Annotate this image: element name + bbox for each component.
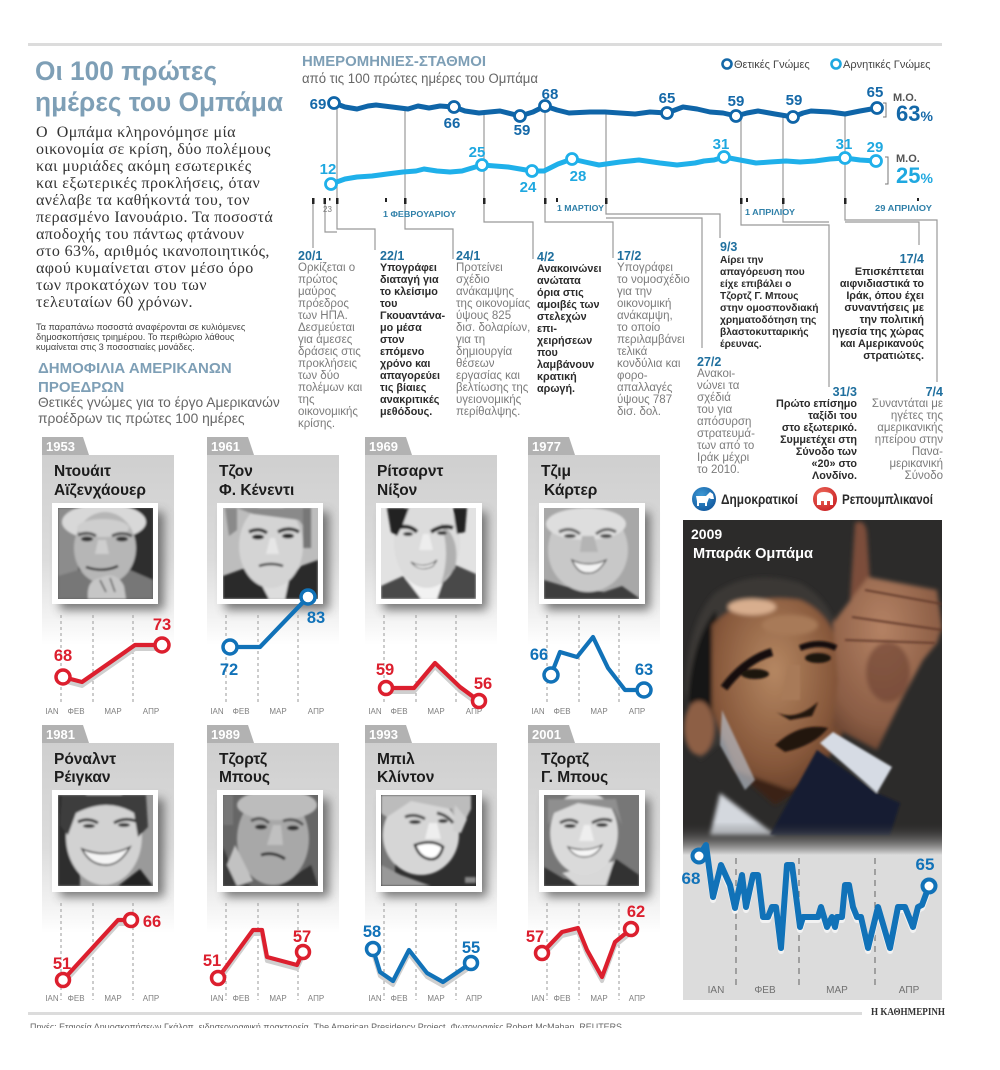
milestone 27/2: των από το [697, 440, 754, 452]
photo: Eisenhower [58, 508, 153, 599]
milestone 17/2: για την [617, 286, 652, 298]
milestone 24/1: περίθαλψης. [456, 406, 520, 418]
panel: Nixon 1969: ΦΕΒ [390, 707, 408, 716]
milestone 31/3: στο εξωτερικό. [782, 422, 857, 434]
panel: Clinton 1993 [363, 725, 497, 1003]
intro text: και μυριάδες ακόμη εσωτερικές [36, 158, 252, 175]
milestone 20/1: Ορκίζεται ο [298, 262, 355, 274]
milestone 20/1: μαύρος [298, 286, 337, 298]
title: Οι 100 πρώτες [35, 56, 217, 86]
milestone 7/4: Σύνοδο [905, 470, 943, 482]
panel: Carter 1977: ΑΠΡ [629, 707, 645, 716]
panel: Obama 2009: ΜΑΡ [826, 985, 848, 996]
panel: Eisenhower 1953: ΦΕΒ [67, 707, 85, 716]
panel: Nixon 1969: ΙΑΝ [368, 707, 382, 716]
milestone 4/2: χειρήσεων [537, 335, 592, 347]
panel: Reagan 1981: ΑΠΡ [143, 994, 159, 1003]
milestone 9/3: απαγόρευση που [720, 267, 805, 278]
milestone 7/4: Πανα- [912, 446, 943, 458]
panel: Kennedy 1961: ΙΑΝ [210, 707, 224, 716]
panel: Carter 1977: Τζιμ [541, 463, 571, 480]
milestone 9/3: έρευνας. [720, 339, 762, 350]
line chart: Eisenhower 68 to 73: 68 [54, 647, 72, 665]
panel: Kennedy 1961: ΜΑΡ [269, 707, 287, 716]
panel: Clinton 1993: ΦΕΒ [390, 994, 408, 1003]
chart: positive opinions line: 66 [444, 115, 460, 132]
milestone 4/2: 4/2 [537, 250, 554, 264]
line chart: Kennedy 72 to 83: 83 [307, 609, 325, 627]
milestone 20/1: πρώτος [298, 274, 338, 286]
milestone 27/2: Ιράκ μέχρι [697, 452, 750, 464]
milestone 22/1: 22/1 [380, 249, 404, 263]
chart: positive opinions line: 65 [867, 84, 883, 101]
milestone 20/1: δράσεις στις [298, 346, 361, 358]
panel: Reagan 1981: 1981 [46, 727, 75, 742]
milestone 17/4 [832, 252, 924, 362]
line chart: Bush 51 to 57 [203, 928, 311, 984]
average: negative 25%: Μ.Ο. [896, 153, 920, 165]
milestone 24/1: δημιουργία [456, 346, 513, 358]
milestone 24/1: θέσεων [456, 358, 495, 370]
timeline ticks and month labels: 23 [323, 205, 332, 214]
panel: Kennedy 1961: ΑΠΡ [308, 707, 324, 716]
milestone 22/1: μεθόδους. [380, 406, 432, 418]
panel: Clinton 1993: Κλίντον [377, 769, 434, 786]
panel: Eisenhower 1953: Ντουάιτ [54, 463, 111, 480]
average: positive 63% [883, 92, 933, 126]
milestone 27/2: Ανακοι- [697, 368, 735, 380]
milestone 4/2: αρωγή. [537, 383, 575, 395]
milestone 7/4: 7/4 [926, 385, 943, 399]
photo: Clinton [381, 795, 476, 886]
milestone 17/2: τελικά [617, 346, 648, 358]
milestone 24/1: ανάκαμψης [456, 286, 515, 298]
newspaper credit: Η ΚΑΘΗΜΕΡΙΝΗ [871, 1007, 945, 1018]
heading: milestones [302, 54, 538, 86]
panel: Carter 1977: ΦΕΒ [553, 707, 571, 716]
line chart: Obama 68 to 65 [682, 845, 936, 951]
chart: negative opinions line: 31 [713, 136, 729, 153]
panel: Nixon 1969: Ρίτσαρντ [377, 463, 443, 480]
milestone 17/2: κονδύλια και [617, 358, 681, 370]
milestone 7/4: αμερικανικής [877, 422, 943, 434]
chart: positive opinions line: 69 [310, 96, 326, 113]
timeline ticks and month labels: 1 ΑΠΡΙΛΙΟΥ [745, 208, 796, 217]
panel: Obama 2009: 2009 [691, 526, 722, 542]
methodology note: δημοσκοπήσεις τριημέρου. Το περιθώριο λάθους [36, 332, 235, 342]
milestone 17/4: αιφνιδιαστικά το [840, 278, 924, 290]
legend: opinions: Αρνητικές Γνώμες [843, 59, 930, 71]
panel: Eisenhower 1953: Αϊζενχάουερ [54, 482, 146, 499]
line chart: Kennedy 72 to 83 [220, 590, 325, 679]
panel: George W. Bush 2001: Τζορτζ [541, 751, 589, 768]
milestone 20/1: οικονομικής [298, 406, 358, 418]
panel: Eisenhower 1953: ΜΑΡ [104, 707, 122, 716]
timeline ticks and month labels: 1 ΦΕΒΡΟΥΑΡΙΟΥ [383, 210, 457, 219]
panel: Carter 1977: Κάρτερ [544, 482, 597, 499]
line chart: Clinton 58 to 55: 55 [462, 939, 480, 957]
chart: positive opinions line [310, 84, 883, 139]
milestone 24/1 [456, 249, 531, 418]
panel: Reagan 1981: ΦΕΒ [67, 994, 85, 1003]
milestone 27/2: 27/2 [697, 355, 721, 369]
milestone 9/3: χρηματοδότηση της [720, 315, 816, 326]
panel: Reagan 1981 [42, 725, 174, 1003]
average: negative 25% [885, 153, 933, 188]
panel: Clinton 1993: ΑΠΡ [466, 994, 482, 1003]
milestone 27/2: στρατευμά- [697, 428, 755, 440]
milestone 17/2: απαλλαγές [617, 382, 673, 394]
legend: opinions [722, 59, 930, 71]
heading: popularity of US presidents: ΔΗΜΟΦΙΛΙΑ ΑΜΕΡΙΚΑΝΩΝ [38, 360, 232, 377]
panel: Reagan 1981: Ρόναλντ [54, 751, 116, 768]
line chart: Clinton 58 to 55 [363, 923, 480, 986]
milestone 22/1 [380, 249, 445, 418]
party legend: Δημοκρατικοί [721, 492, 798, 507]
line chart: Carter 66 to 63 [530, 637, 653, 697]
milestone 24/1: για τη [456, 334, 485, 346]
milestone 9/3: Αίρει την [720, 255, 764, 266]
milestone 20/1: πρόεδρος [298, 298, 349, 310]
line chart: Nixon 59 to 56 [376, 661, 492, 708]
panel: George Bush 1989: Τζορτζ [219, 751, 267, 768]
milestone 22/1: στον [380, 334, 405, 346]
line chart: Obama 68 to 65: 68 [682, 869, 700, 888]
title [35, 56, 283, 117]
party legend [692, 487, 933, 511]
intro text: τελευταίων 60 χρόνων. [36, 294, 193, 311]
chart: positive opinions line: 65 [659, 90, 675, 107]
photo: George W. Bush [544, 795, 639, 886]
milestone 17/4: συναντήσεις με [844, 302, 924, 314]
panel: Clinton 1993: ΜΑΡ [427, 994, 445, 1003]
milestone 17/2: το οποίο [617, 322, 660, 334]
milestone 4/2: όρια στις [537, 287, 584, 299]
milestone 7/4: Συναντάται με [872, 398, 943, 410]
milestone 31/3: ταξίδι του [808, 410, 857, 422]
panel: Kennedy 1961 [207, 437, 339, 716]
milestone 24/1: υγειονομικής [456, 394, 522, 406]
panel: George W. Bush 2001: ΑΠΡ [629, 994, 645, 1003]
milestone 17/4: Επισκέπτεται [855, 266, 924, 278]
milestone 17/2: ύψους 787 [617, 394, 672, 406]
intro text: αποδοχής του πάντως φτάνουν [36, 226, 244, 243]
party legend: Ρεπουμπλικανοί [842, 492, 933, 507]
milestone 4/2: ανώτατα [537, 275, 581, 287]
panel: Nixon 1969: ΑΠΡ [466, 707, 482, 716]
milestone 17/2: φορο- [617, 370, 648, 382]
milestone 22/1: τις βίαιες [380, 382, 427, 394]
milestone 9/3: στην ομοσπονδιακή [720, 303, 818, 314]
milestone 24/1: βελτίωσης της [456, 382, 529, 394]
milestone 24/1: εργασίας και [456, 370, 520, 382]
line chart: Carter 66 to 63: 63 [635, 661, 653, 679]
line chart: Clinton 58 to 55: 58 [363, 923, 381, 941]
panel: George W. Bush 2001: Γ. Μπους [541, 769, 608, 786]
dashed month lines [736, 858, 875, 985]
photo: Carter [544, 508, 639, 599]
line chart: Kennedy 72 to 83: 72 [220, 661, 238, 679]
milestone 24/1: δισ. δολαρίων, [456, 322, 530, 334]
milestone 4/2: Ανακοινώνει [537, 263, 602, 275]
methodology note: κυμαίνεται στις 3 ποσοστιαίες μονάδες. [36, 342, 195, 352]
milestone 22/1: το κλείσιμο [380, 286, 438, 298]
footer rule [28, 1012, 862, 1015]
milestone 27/2: απόσυρση [697, 416, 751, 428]
milestone 17/2: περιλαμβάνει [617, 334, 685, 346]
panel: Reagan 1981: ΙΑΝ [45, 994, 59, 1003]
milestone 20/1: κρίσης. [298, 418, 335, 430]
panel: Reagan 1981: ΜΑΡ [104, 994, 122, 1003]
milestone 20/1: των ΗΠΑ. [298, 310, 348, 322]
panel: Carter 1977: 1977 [532, 439, 561, 454]
panel: Carter 1977: ΙΑΝ [531, 707, 545, 716]
panel: George Bush 1989: ΜΑΡ [269, 994, 287, 1003]
heading: milestones: ΗΜΕΡΟΜΗΝΙΕΣ-ΣΤΑΘΜΟΙ [302, 54, 486, 70]
photo: Kennedy [223, 508, 318, 599]
milestone 17/4: στρατιώτες. [863, 350, 924, 362]
milestone 9/3: 9/3 [720, 240, 737, 254]
panel: Clinton 1993: ΙΑΝ [368, 994, 382, 1003]
chart: negative opinions line [320, 136, 883, 196]
legend: opinions: Θετικές Γνώμες [734, 59, 810, 71]
panel: George Bush 1989: ΑΠΡ [308, 994, 324, 1003]
chart: positive opinions line: 59 [786, 92, 802, 109]
milestone 24/1: σχέδιο [456, 274, 490, 286]
milestone 17/2: 17/2 [617, 249, 641, 263]
milestone 20/1 [298, 249, 363, 430]
panel: George Bush 1989 [203, 725, 339, 1003]
milestone 24/1: της οικονομίας [456, 298, 531, 310]
intro text: και εξωτερικές προκλήσεις, όταν [36, 175, 260, 192]
panel: George W. Bush 2001: ΜΑΡ [590, 994, 608, 1003]
milestone 17/4: ηγεσία της χώρας [832, 326, 924, 338]
milestone 4/2: λαμβάνουν [537, 359, 594, 371]
milestone 20/1: των δύο [298, 370, 339, 382]
milestone 22/1: Υπογράφει [380, 262, 437, 274]
milestone 4/2: επι- [537, 323, 557, 335]
milestone 24/1: Προτείνει [456, 262, 503, 274]
panel: Reagan 1981: Ρέιγκαν [54, 769, 111, 786]
panel: George Bush 1989: 1989 [211, 727, 240, 742]
milestone 20/1: της [298, 394, 315, 406]
chart: negative opinions line: 31 [836, 136, 852, 153]
panel: Kennedy 1961: 1961 [211, 439, 240, 454]
milestone 31/3: Σύνοδο των [796, 446, 857, 458]
panel: Kennedy 1961: ΦΕΒ [232, 707, 250, 716]
milestone 17/2: το νομοσχέδιο [617, 274, 690, 286]
photo: Nixon [381, 508, 476, 599]
panel: Obama 2009: ΙΑΝ [708, 985, 724, 996]
panel: Eisenhower 1953: 1953 [46, 439, 75, 454]
milestone 9/3 [720, 240, 818, 350]
milestone 27/2: το 2010. [697, 464, 740, 476]
milestone 7/4: ηγέτες της [891, 410, 943, 422]
title: ημέρες του Ομπάμα [35, 87, 283, 117]
line chart: Nixon 59 to 56: 59 [376, 661, 394, 679]
photo: Reagan [58, 795, 153, 886]
line chart: Reagan 51 to 66 [53, 913, 161, 986]
heading: popularity of US presidents: ΠΡΟΕΔΡΩΝ [38, 379, 124, 396]
milestone 17/4: Ιράκ, όπου έχει [846, 290, 924, 302]
panel: Eisenhower 1953: ΙΑΝ [45, 707, 59, 716]
timeline ticks and month labels: 29 ΑΠΡΙΛΙΟΥ [875, 204, 933, 213]
intro text: Ο Ομπάμα κληρονόμησε μία [36, 124, 236, 141]
milestone 31/3: «20» στο [811, 458, 857, 470]
milestone 4/2: αμοιβές των [537, 299, 600, 311]
line chart: Bush 51 to 57: 51 [203, 952, 221, 970]
line chart: G. W. Bush 57 to 62: 57 [526, 928, 544, 946]
milestone 20/1: Δεσμεύεται [298, 322, 355, 334]
panel: Obama 2009: Μπαράκ Ομπάμα [693, 546, 813, 562]
milestone 17/2: οικονομική [617, 298, 671, 310]
panel: Kennedy 1961: Τζον [219, 463, 253, 480]
methodology note: Τα παραπάνω ποσοστά αναφέρονται σε κυλιόμενες [36, 322, 246, 332]
chart: negative opinions line: 12 [320, 161, 336, 178]
panel: Nixon 1969: 1969 [369, 439, 398, 454]
panel: George Bush 1989: ΙΑΝ [210, 994, 224, 1003]
milestone 27/2: νώνει τα [697, 380, 740, 392]
milestone 9/3: Τζορτζ Γ. Μπους [720, 291, 798, 302]
milestone 22/1: του [380, 298, 397, 310]
milestone 31/3: Πρώτο επίσημο [776, 398, 857, 410]
milestone 4/2: κρατική [537, 371, 577, 383]
chart: negative opinions line: 25 [469, 144, 485, 161]
panel: George W. Bush 2001: ΦΕΒ [553, 994, 571, 1003]
average: negative 25%: 25% [896, 163, 933, 188]
chart: positive opinions line: 59 [728, 93, 744, 110]
milestone 27/2: σχέδιά [697, 392, 731, 404]
panel: George Bush 1989: Μπους [219, 769, 270, 786]
milestone 24/1: 24/1 [456, 249, 480, 263]
panel: Clinton 1993: 1993 [369, 727, 398, 742]
milestone 17/4: και Αμερικανούς [840, 338, 924, 350]
line chart: G. W. Bush 57 to 62: 62 [627, 903, 645, 921]
milestone 4/2: που [537, 347, 558, 359]
milestone 22/1: απαγορεύει [380, 370, 440, 382]
panel: George W. Bush 2001: 2001 [532, 727, 561, 742]
chart: negative opinions line: 28 [570, 168, 586, 185]
milestone 17/2: Υπογράφει [617, 262, 673, 274]
line chart: Reagan 51 to 66: 66 [143, 913, 161, 931]
line chart: Reagan 51 to 66: 51 [53, 955, 71, 973]
panel: Obama 2009: ΦΕΒ [754, 985, 776, 996]
line chart: Obama 68 to 65: 65 [916, 855, 934, 874]
panel: Carter 1977 [528, 437, 660, 716]
milestone 27/2 [697, 355, 755, 476]
panel: Nixon 1969: Νίξον [377, 482, 417, 499]
milestone 22/1: Γκουαντάνα- [380, 310, 445, 322]
milestone 31/3 [776, 385, 857, 482]
chart: negative opinions line: 29 [867, 139, 883, 156]
intro text: οικονομία σε κρίση, δύο πολέμους [36, 141, 271, 158]
panel: George W. Bush 2001: ΙΑΝ [531, 994, 545, 1003]
milestone 4/2: στελεχών [537, 311, 587, 323]
panel: Carter 1977: ΜΑΡ [590, 707, 608, 716]
average: positive 63%: Μ.Ο. [893, 92, 917, 104]
photo: George Bush [223, 795, 318, 886]
line chart: Bush 51 to 57: 57 [293, 928, 311, 946]
milestone 22/1: μο μέσα [380, 322, 422, 334]
timeline ticks and month labels: 1 ΜΑΡΤΙΟΥ [557, 204, 605, 213]
dashed month lines [61, 615, 133, 703]
milestone 24/1: ύψους 825 [456, 310, 511, 322]
heading: popularity of US presidents: Θετικές γνώμες για το έργο Αμερικανών [38, 395, 280, 410]
intro text: ανέλαβε τα καθήκοντά του, τον [36, 192, 250, 209]
panel: Nixon 1969 [365, 437, 497, 716]
panel: Eisenhower 1953: ΑΠΡ [143, 707, 159, 716]
line chart: Carter 66 to 63: 66 [530, 646, 548, 664]
connector lines [313, 108, 937, 387]
icon: republican elephant [813, 487, 837, 511]
milestone 22/1: διαταγή για [380, 274, 439, 286]
milestone 20/1: προκλήσεις [298, 358, 358, 370]
milestone 22/1: επόμενο [380, 346, 425, 358]
intro text: περασμένο Ιανουάριο. Τα ποσοστά [36, 209, 273, 226]
milestone 7/4: ηπείρου στην [875, 434, 943, 446]
milestone 4/2 [537, 250, 602, 395]
line chart: Eisenhower 68 to 73: 73 [153, 616, 171, 634]
milestone 9/3: είχε επιβάλει ο [720, 279, 792, 290]
heading: milestones: από τις 100 πρώτες ημέρες του Ομπάμα [302, 71, 538, 86]
milestone 9/3: βλαστοκυτταρικής [720, 327, 808, 338]
intro text: στο 63%, αριθμός ικανοποιητικός, [36, 243, 270, 260]
milestone 31/3: Συμμετέχει στη [780, 434, 857, 446]
milestone 17/4: 17/4 [900, 252, 924, 266]
heading: popularity of US presidents [38, 360, 280, 426]
line chart: Nixon 59 to 56: 56 [474, 675, 492, 693]
panel: George W. Bush 2001 [526, 725, 660, 1003]
milestone 7/4 [872, 385, 943, 482]
milestone 27/2: του για [697, 404, 733, 416]
milestone 31/3: 31/3 [833, 385, 857, 399]
milestone 17/2 [617, 249, 690, 418]
icon: democrat donkey [692, 487, 716, 511]
milestone 22/1: χρόνο και [380, 358, 430, 370]
milestone 7/4: μερικανική [889, 458, 943, 470]
panel: Kennedy 1961: Φ. Κένεντι [219, 482, 294, 499]
milestone 22/1: ανακριτικές [380, 394, 440, 406]
panel: Clinton 1993: Μπιλ [377, 751, 415, 768]
milestone 20/1: 20/1 [298, 249, 322, 263]
chart: positive opinions line: 59 [514, 122, 530, 139]
photo: Obama [683, 520, 942, 854]
heading: popularity of US presidents: προέδρων τις πρώτες 100 ημέρες [38, 411, 245, 426]
milestone 17/2: δισ. δολ. [617, 406, 661, 418]
intro text: αφού κυμαίνεται στον μέσο όρο [36, 260, 254, 277]
milestone 20/1: πολέμων και [298, 382, 363, 394]
panel: Obama 2009: ΑΠΡ [899, 985, 920, 996]
chart: negative opinions line: 24 [520, 179, 537, 196]
timeline ticks and month labels [312, 198, 933, 219]
line chart: G. W. Bush 57 to 62 [526, 903, 645, 981]
milestone 17/4: την πολιτική [860, 314, 924, 326]
panel: Eisenhower 1953 [42, 437, 174, 716]
chart: positive opinions line: 68 [542, 86, 558, 103]
panel: Obama 2009 [682, 520, 942, 1000]
intro text: των προκατόχων του των [36, 277, 207, 294]
top rule [28, 43, 942, 46]
line chart: Eisenhower 68 to 73 [54, 616, 171, 686]
panel: Nixon 1969: ΜΑΡ [427, 707, 445, 716]
panel: George Bush 1989: ΦΕΒ [232, 994, 250, 1003]
milestone 20/1: για άμεσες [298, 334, 353, 346]
average: positive 63%: 63% [896, 101, 933, 126]
milestone 31/3: Λονδίνο. [812, 470, 857, 482]
milestone 17/2: ανάκαμψη, [617, 310, 673, 322]
